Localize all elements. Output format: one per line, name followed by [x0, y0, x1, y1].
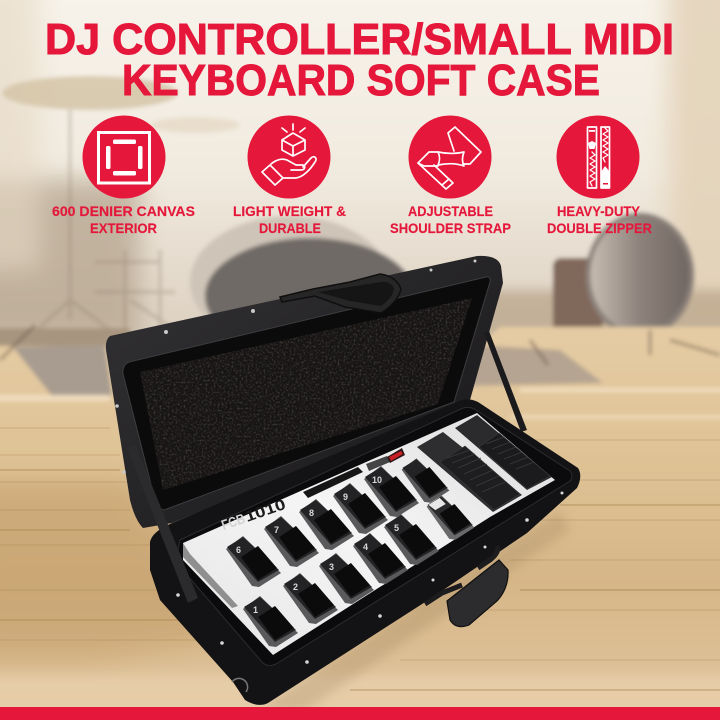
lid handle [280, 274, 401, 313]
label: heavy-duty double zipper [547, 203, 652, 236]
case shadow [260, 510, 570, 714]
title: DJ CONTROLLER/SMALL MIDI [45, 15, 674, 64]
feature: 600 denier canvas exterior [52, 116, 195, 236]
display strip [303, 467, 363, 498]
left lid support strap [127, 444, 198, 603]
label: 600 denier canvas exterior: 600 DENIER CANVAS [52, 203, 195, 219]
label: heavy-duty double zipper: HEAVY-DUTY [557, 203, 641, 219]
foot switches: 4 [363, 542, 368, 552]
front carry handle [425, 546, 508, 627]
foot switches: 2 [293, 582, 298, 592]
case base [150, 399, 580, 705]
label: heavy-duty double zipper: DOUBLE ZIPPER [547, 220, 652, 236]
brand 1010: 1010 [243, 496, 288, 526]
foot switches [226, 458, 474, 647]
brand 1010: FCB [219, 510, 247, 533]
icon: hand holding cube [248, 116, 330, 198]
right lid support strap [484, 331, 527, 432]
icon: canvas square [82, 116, 166, 198]
label: adjustable shoulder strap [390, 203, 511, 236]
icon: double zipper [556, 116, 640, 198]
label: adjustable shoulder strap: SHOULDER STRAP [390, 220, 511, 236]
label: adjustable shoulder strap: ADJUSTABLE [408, 203, 493, 219]
product photo: open soft case with foot controller [106, 256, 580, 714]
foot switches: 3 [329, 562, 334, 572]
open lid [106, 256, 503, 528]
foot switches: 7 [274, 525, 279, 535]
label: light weight and durable: DURABLE [259, 220, 321, 236]
foot controller panel [183, 413, 555, 655]
title [45, 15, 674, 105]
foot switches: 10 [372, 475, 382, 485]
feature: light weight and durable [233, 116, 346, 236]
feature: adjustable shoulder strap [390, 116, 511, 236]
foot switches: 8 [309, 508, 314, 518]
foot switches: 1 [253, 605, 258, 615]
foot switches: 5 [394, 523, 399, 533]
expression pedals [417, 415, 552, 512]
brand 1010 [219, 496, 288, 534]
foot switches: 9 [343, 492, 348, 502]
icon: strap with buckle [408, 116, 492, 198]
label: light weight and durable: LIGHT WEIGHT & [233, 203, 346, 219]
footer bar [0, 707, 720, 720]
foot switches: 6 [236, 545, 241, 555]
label: 600 denier canvas exterior [52, 203, 195, 236]
label: 600 denier canvas exterior: EXTERIOR [90, 220, 157, 236]
label: light weight and durable [233, 203, 346, 236]
title: KEYBOARD SOFT CASE [122, 56, 600, 105]
feature: heavy-duty double zipper [547, 116, 652, 236]
